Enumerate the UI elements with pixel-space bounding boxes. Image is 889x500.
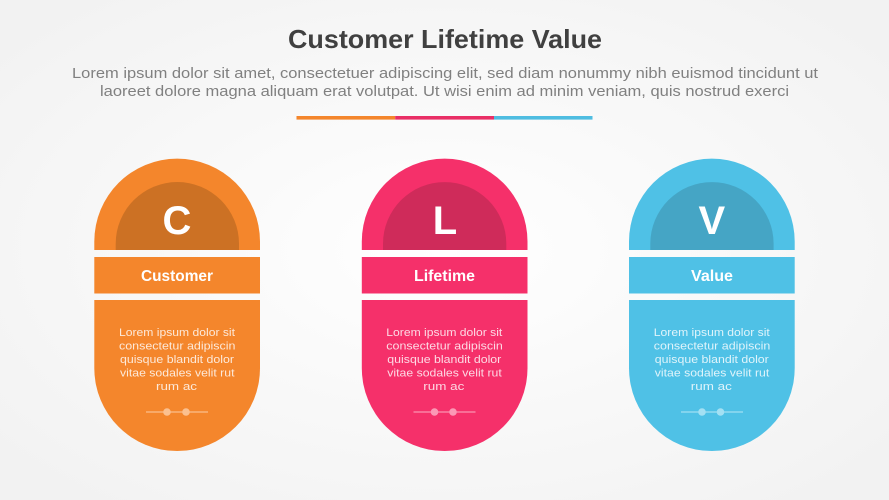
panel body: customer	[94, 300, 260, 451]
heading: customer: Customer	[141, 268, 213, 285]
slider ornament: value	[681, 408, 743, 416]
panel top dome: lifetime	[362, 159, 528, 250]
icon backing dome: value	[650, 182, 774, 250]
icon backing dome: customer	[116, 182, 239, 250]
letter C: C	[163, 199, 191, 243]
body text: customer	[119, 327, 236, 393]
body text: lifetime: vitae sodales velit rut	[387, 368, 503, 380]
heading band: customer	[94, 257, 260, 294]
body text: lifetime: Lorem ipsum dolor sit	[386, 327, 503, 339]
panel top dome: customer	[94, 159, 260, 250]
body text: value	[654, 327, 771, 393]
body text: value: vitae sodales velit rut	[655, 368, 770, 380]
body text: lifetime: consectetur adipiscin	[386, 340, 503, 352]
heading band: value	[629, 257, 795, 294]
subtitle text block	[72, 65, 819, 100]
body text: value: Lorem ipsum dolor sit	[654, 327, 771, 339]
title: Customer Lifetime Value	[288, 24, 602, 54]
body text: lifetime: quisque blandit dolor	[387, 354, 502, 366]
body text: customer: rum ac	[156, 381, 197, 393]
body text: value: consectetur adipiscin	[654, 340, 770, 352]
body text: value: quisque blandit dolor	[655, 354, 769, 366]
body text: customer: vitae sodales velit rut	[120, 368, 235, 380]
body text: customer: quisque blandit dolor	[120, 354, 234, 366]
letter V: V	[698, 199, 725, 243]
body text: customer: consectetur adipiscin	[119, 340, 236, 352]
subtitle text block: laoreet dolore magna aliquam erat volutpat. Ut wisi enim ad minim veniam, quis nostrud exerci	[100, 83, 789, 100]
panel body: value	[629, 300, 795, 451]
panel body: lifetime	[362, 300, 528, 451]
subtitle text block: Lorem ipsum dolor sit amet, consectetuer adipiscing elit, sed diam nonummy nibh euismod tincidunt ut	[72, 65, 819, 82]
panel: value	[629, 159, 795, 451]
letter L: L	[433, 199, 457, 243]
icon backing dome: lifetime	[383, 182, 506, 250]
heading: value: Value	[691, 268, 733, 285]
body text: customer: Lorem ipsum dolor sit	[119, 327, 236, 339]
slider ornament: customer	[146, 408, 208, 416]
heading: lifetime: Lifetime	[414, 268, 475, 285]
slider ornament: lifetime	[414, 408, 476, 416]
panel: lifetime	[362, 159, 528, 451]
panel top dome: value	[629, 159, 795, 250]
heading band: lifetime	[362, 257, 528, 294]
body text: value: rum ac	[691, 381, 732, 393]
body text: lifetime: rum ac	[423, 381, 465, 393]
tricolor divider	[296, 116, 592, 120]
panel: customer	[94, 159, 260, 451]
body text: lifetime	[386, 327, 503, 393]
